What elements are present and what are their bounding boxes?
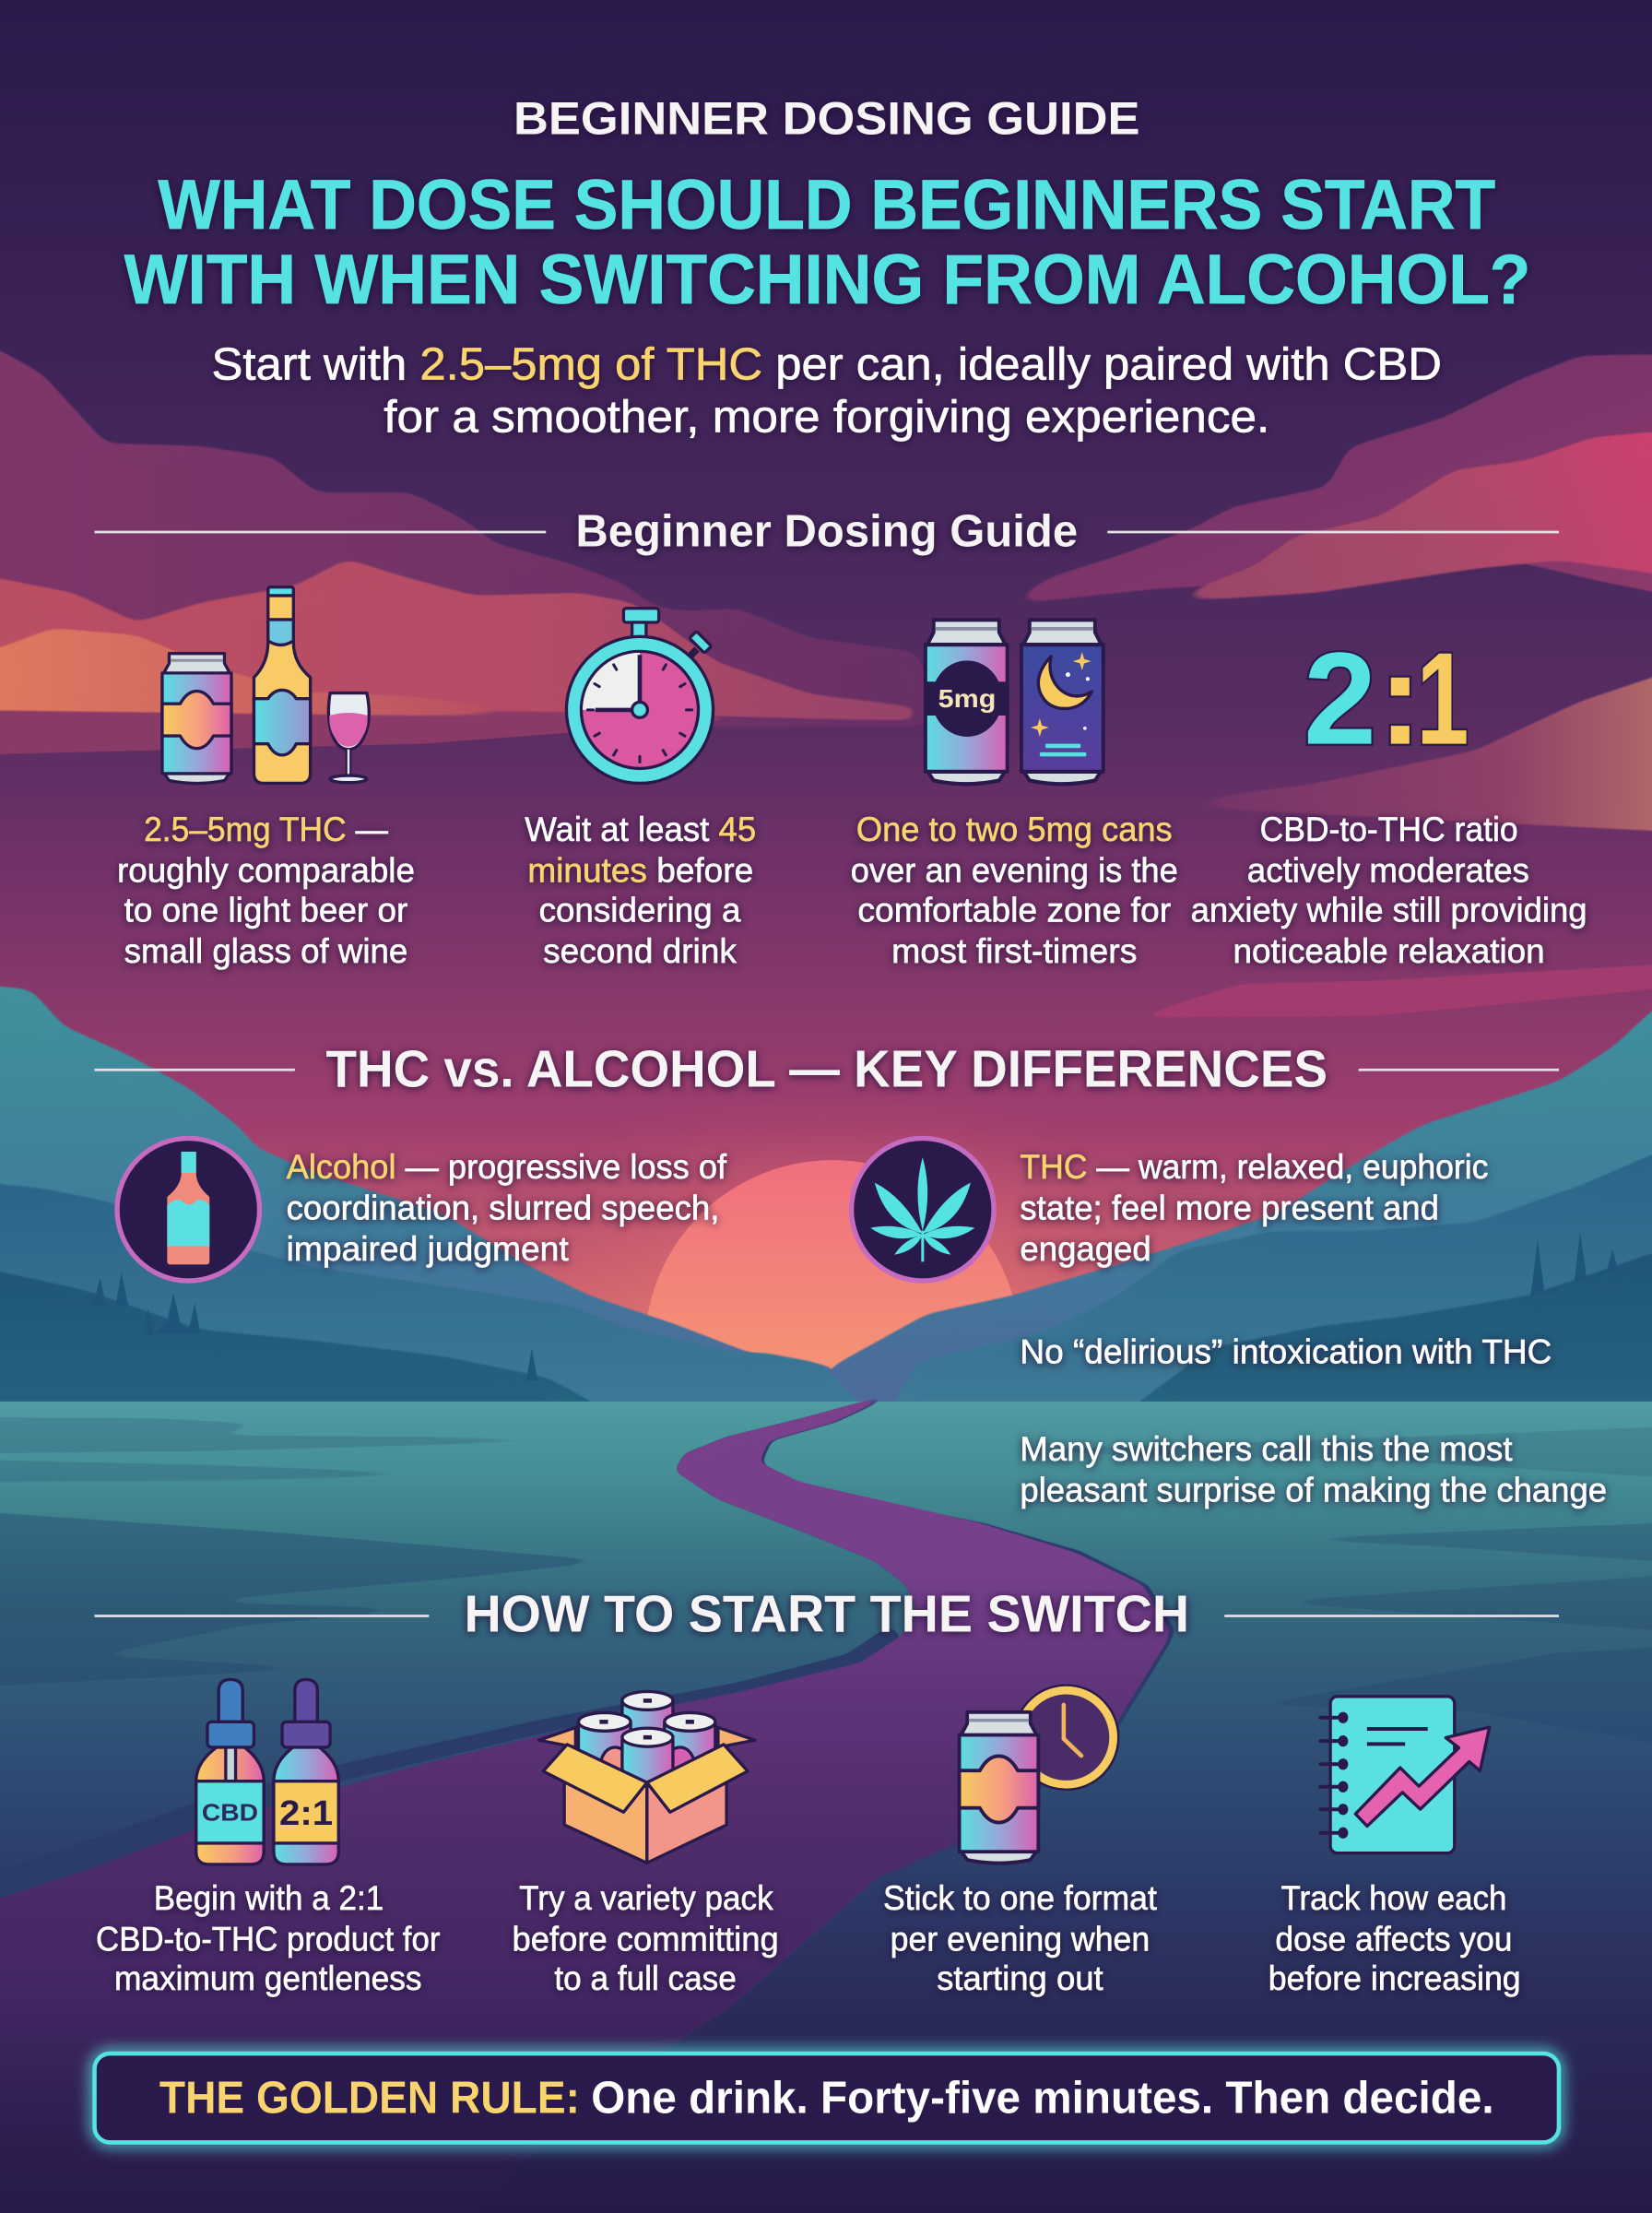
text: track each dose: Track how each (1281, 1878, 1506, 1917)
text: dose comparison: 2.5–5mg THC — (144, 810, 388, 848)
text: track each dose (1268, 1878, 1521, 1997)
text: variety pack: Try a variety pack (519, 1878, 773, 1917)
section heading: THC vs alcohol: THC vs. ALCOHOL — KEY DIFFERENCES (326, 1040, 1328, 1098)
box flaps (543, 1745, 647, 1812)
river edge stripe (0, 1626, 903, 1926)
text: pleasant surprise: pleasant surprise of making the change (1020, 1471, 1607, 1509)
text: no delirious intoxication: No “delirious” intoxication with THC (1020, 1332, 1552, 1371)
text: THC effects: THC — warm, relaxed, euphoric (1020, 1147, 1488, 1186)
text: THC effects: state; feel more present and (1020, 1188, 1439, 1226)
icon: two 5mg cans (926, 620, 1103, 784)
text: one format: starting out (937, 1959, 1103, 1997)
sun glow (423, 1087, 1242, 1538)
text: one to two cans: over an evening is the (851, 851, 1178, 890)
icon: cannabis leaf badge (852, 1138, 994, 1281)
front mountains (0, 1242, 1652, 1426)
text: dose comparison: to one light beer or (124, 890, 407, 929)
text: 2:1 product: CBD-to-THC product for (96, 1919, 440, 1958)
icon: 2:1 ratio: 1 (1416, 626, 1469, 773)
icon: can with clock (960, 1686, 1118, 1864)
eyebrow heading: BEGINNER DOSING GUIDE (513, 91, 1139, 144)
golden rule callout (95, 2053, 1559, 2142)
icon: stopwatch (566, 609, 714, 783)
subtitle (212, 340, 1442, 442)
mid clouds (0, 559, 1652, 1018)
subtitle: for a smoother, more forgiving experience. (384, 392, 1269, 442)
text: CBD ratio: actively moderates (1247, 851, 1529, 890)
text: one to two cans: comfortable zone for (857, 890, 1171, 929)
icon: 2:1 ratio (1304, 626, 1469, 773)
text: one format: per evening when (891, 1919, 1150, 1958)
icon: variety pack box (539, 1691, 755, 1863)
text: pleasant surprise: Many switchers call this the most (1020, 1429, 1513, 1468)
text: wait 45 minutes: minutes before (527, 851, 753, 890)
water (0, 1402, 1652, 2213)
text: track each dose: dose affects you (1275, 1919, 1512, 1958)
text: alcohol effects (287, 1147, 727, 1268)
text: track each dose: before increasing (1268, 1959, 1521, 1997)
dropper: CBD (196, 1679, 264, 1864)
text: one to two cans: most first-timers (891, 931, 1137, 970)
back mountains (0, 981, 1652, 1426)
text: 2:1 product (96, 1878, 440, 1997)
text: one format: Stick to one format (883, 1878, 1157, 1917)
can (960, 1712, 1038, 1864)
icon: dropper bottles (196, 1679, 338, 1864)
beer bottle (254, 587, 311, 783)
text: alcohol effects: impaired judgment (287, 1229, 569, 1268)
text: one to two cans (851, 810, 1178, 970)
text: dose comparison (117, 810, 415, 970)
box faces (564, 1771, 647, 1863)
text: alcohol effects: Alcohol — progressive loss of (287, 1147, 727, 1186)
golden rule callout: One drink. Forty-five minutes. Then decide. (591, 2073, 1494, 2123)
text: wait 45 minutes: considering a (539, 890, 741, 929)
can: night (1021, 620, 1103, 784)
text: variety pack: to a full case (554, 1959, 737, 1997)
text: CBD ratio: CBD-to-THC ratio (1260, 810, 1518, 848)
clock (1014, 1686, 1118, 1790)
text: 2:1 product: Begin with a 2:1 (154, 1878, 384, 1917)
text: wait 45 minutes: Wait at least 45 (525, 810, 756, 848)
main title (124, 166, 1530, 319)
wine glass (328, 693, 369, 783)
text: one to two cans: One to two 5mg cans (856, 810, 1173, 848)
golden rule callout: THE GOLDEN RULE: (159, 2073, 580, 2123)
text: pleasant surprise (1020, 1429, 1607, 1509)
text: CBD ratio: noticeable relaxation (1233, 931, 1545, 970)
text: alcohol effects: coordination, slurred speech, (287, 1188, 719, 1226)
dropper: 2:1: 2:1 (279, 1793, 333, 1833)
text: variety pack: before committing (513, 1919, 779, 1958)
text: dose comparison: small glass of wine (124, 931, 407, 970)
text: one format (883, 1878, 1157, 1997)
text: wait 45 minutes: second drink (543, 931, 737, 970)
middle mountains (0, 1141, 1652, 1426)
icon: notebook with rising arrow (1320, 1697, 1490, 1853)
back clouds (0, 338, 1652, 727)
dropper: CBD: CBD (202, 1798, 258, 1826)
text: CBD ratio (1191, 810, 1587, 970)
icon: alcohol bottle badge (117, 1138, 260, 1281)
icon: 2:1 ratio: 2 (1304, 626, 1376, 773)
water streaks (0, 1417, 1652, 1750)
river (0, 1397, 1175, 2213)
sky (0, 0, 1652, 1412)
text: THC effects (1020, 1147, 1488, 1268)
tree lines (93, 1231, 1618, 1380)
main title: WHAT DOSE SHOULD BEGINNERS START (158, 166, 1495, 244)
text: THC effects: engaged (1020, 1229, 1151, 1268)
section heading: how to start the switch: HOW TO START THE SWITCH (464, 1584, 1189, 1642)
text: variety pack (513, 1878, 779, 1997)
section heading: beginner dosing guide: Beginner Dosing Guide (575, 506, 1078, 556)
text: 2:1 product: maximum gentleness (114, 1959, 422, 1997)
text: CBD ratio: anxiety while still providing (1191, 890, 1587, 929)
icon: 2:1 ratio: : (1378, 626, 1422, 773)
text: wait 45 minutes (525, 810, 756, 970)
subtitle: Start with 2.5–5mg of THC per can, ideally paired with CBD (212, 340, 1442, 390)
main title: WITH WHEN SWITCHING FROM ALCOHOL? (124, 241, 1530, 319)
cans in box (578, 1691, 715, 1788)
icon: can, beer bottle and wine glass (162, 587, 369, 784)
can: 5mg (926, 620, 1008, 784)
can (162, 654, 231, 784)
sun (644, 1160, 1020, 1535)
can: 5mg: 5mg (938, 684, 996, 713)
text: dose comparison: roughly comparable (117, 851, 415, 890)
dropper: 2:1 (274, 1679, 338, 1864)
